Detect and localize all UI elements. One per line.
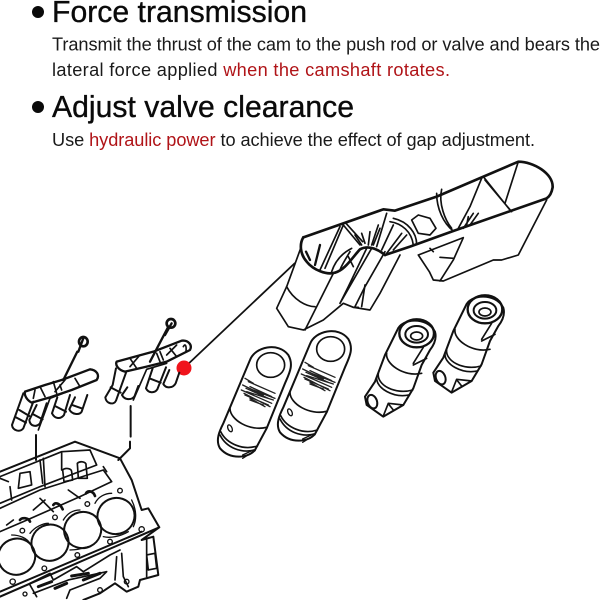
description: force transmission: Transmit the thrust of the cam to the push rod or valve and bears the (52, 34, 600, 54)
lifter 4 (433, 295, 504, 393)
diagram: plain lifters (218, 331, 351, 458)
diagram: bracket lower legs (277, 248, 400, 330)
right assembly (105, 319, 191, 403)
lifter 2 (278, 331, 351, 442)
cylinder bores (0, 492, 141, 581)
lower deck details (30, 538, 157, 598)
connector lines (36, 406, 131, 460)
heading: adjust valve clearance: Adjust valve clearance (52, 91, 354, 124)
block outline (0, 442, 159, 600)
lifter 3 (365, 319, 436, 417)
diagram: small exploded assemblies (12, 319, 191, 460)
diagram: roller lifters (365, 295, 504, 417)
valley details (0, 450, 112, 532)
description line 2 with red highlight: lateral force applied when the camshaft rotates. (52, 60, 450, 80)
section: force transmission (32, 0, 600, 80)
lifter 1 (218, 347, 291, 458)
section: adjust valve clearance (32, 91, 535, 150)
bullet (32, 101, 44, 113)
description: adjust valve clearance: Use hydraulic power to achieve the effect of gap adjustment. (52, 130, 535, 150)
red marker dot (176, 360, 192, 376)
diagram: engine block (0, 442, 159, 600)
diagram: large lifter guide bracket (301, 162, 553, 281)
leader line with red dot (176, 263, 295, 376)
bullet (32, 6, 44, 18)
left assembly (12, 337, 98, 431)
